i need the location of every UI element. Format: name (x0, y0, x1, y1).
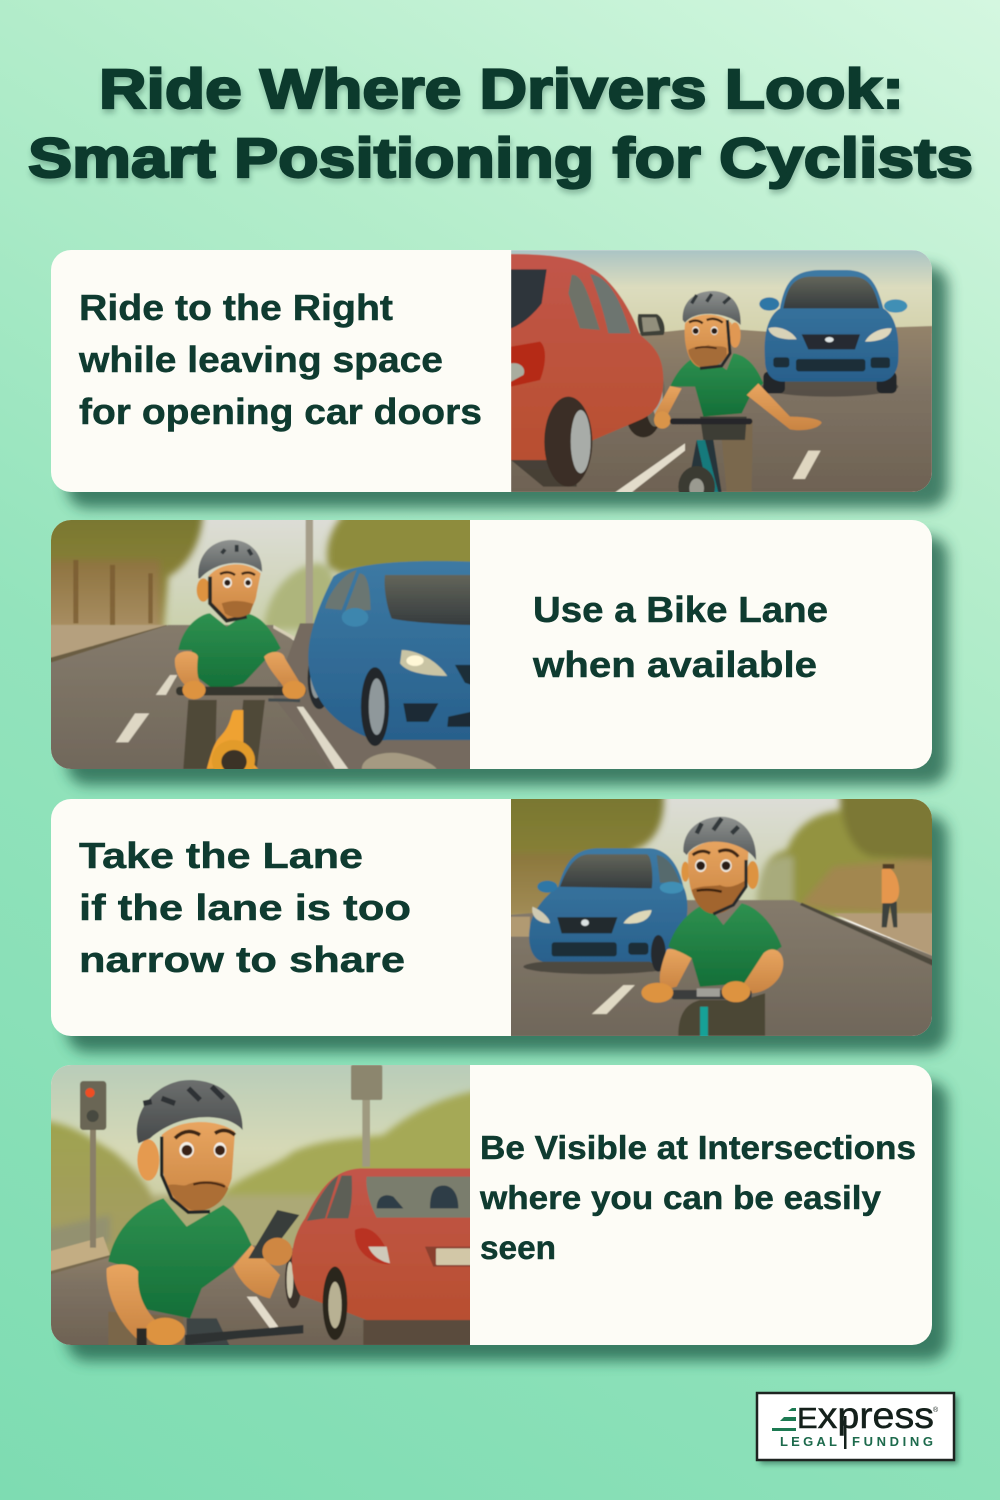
text: take the lane: Take the Lane (79, 835, 363, 876)
panel: be visible at intersections (37, 1055, 948, 1361)
illustration: cyclist taking the lane (497, 787, 940, 1037)
title: Smart Positioning for Cyclists (28, 126, 973, 189)
blue car (308, 561, 472, 746)
title: Ride Where Drivers Look: (99, 57, 904, 120)
cyclist (654, 291, 822, 507)
text: ride to the right: Ride to the Right (79, 287, 393, 328)
cyclist (641, 817, 783, 1037)
text: ride to the right (78, 287, 482, 432)
blue car (523, 848, 687, 974)
panel: ride to the right (51, 250, 948, 508)
logo: Express Legal Funding: Express (797, 1395, 934, 1436)
text: be visible at intersections (479, 1129, 916, 1266)
cyclist (107, 1080, 303, 1347)
red car (511, 254, 665, 487)
text: take the lane: narrow to share (79, 939, 405, 980)
title: Ride Where Drivers Look: (100, 61, 905, 124)
traffic light (80, 1081, 106, 1248)
red car (285, 1168, 473, 1345)
title: Smart Positioning for Cyclists (29, 130, 974, 193)
text: take the lane: if the lane is too (79, 887, 411, 928)
text: be visible at intersections: Be Visible at Intersections (480, 1129, 916, 1166)
pedestrian (882, 864, 899, 927)
title (28, 57, 974, 193)
illustration: cyclist between red and blue cars (511, 250, 934, 507)
text: use a bike lane: when available (532, 644, 817, 685)
text: take the lane (79, 835, 411, 980)
logo: Express Legal Funding: ® (933, 1406, 939, 1414)
cyclist (175, 540, 306, 780)
text: ride to the right: while leaving space (78, 339, 443, 380)
illustration: cyclist at intersection with red car (37, 1055, 480, 1347)
logo: Express Legal Funding: FUNDING (852, 1434, 933, 1449)
text: be visible at intersections: seen (480, 1229, 556, 1266)
text: use a bike lane: Use a Bike Lane (533, 589, 828, 630)
text: be visible at intersections: where you can be easily (479, 1179, 882, 1216)
logo: Express Legal Funding (757, 1393, 958, 1464)
illustration: cyclist in bike lane with blue car (51, 520, 470, 769)
blue car (759, 270, 907, 397)
panel: take the lane (51, 787, 948, 1052)
panel: use a bike lane (37, 507, 948, 785)
text: use a bike lane (532, 589, 828, 685)
text: ride to the right: for opening car doors (79, 391, 482, 432)
logo: Express Legal Funding: LEGAL (780, 1434, 837, 1449)
street sign (351, 1065, 382, 1167)
